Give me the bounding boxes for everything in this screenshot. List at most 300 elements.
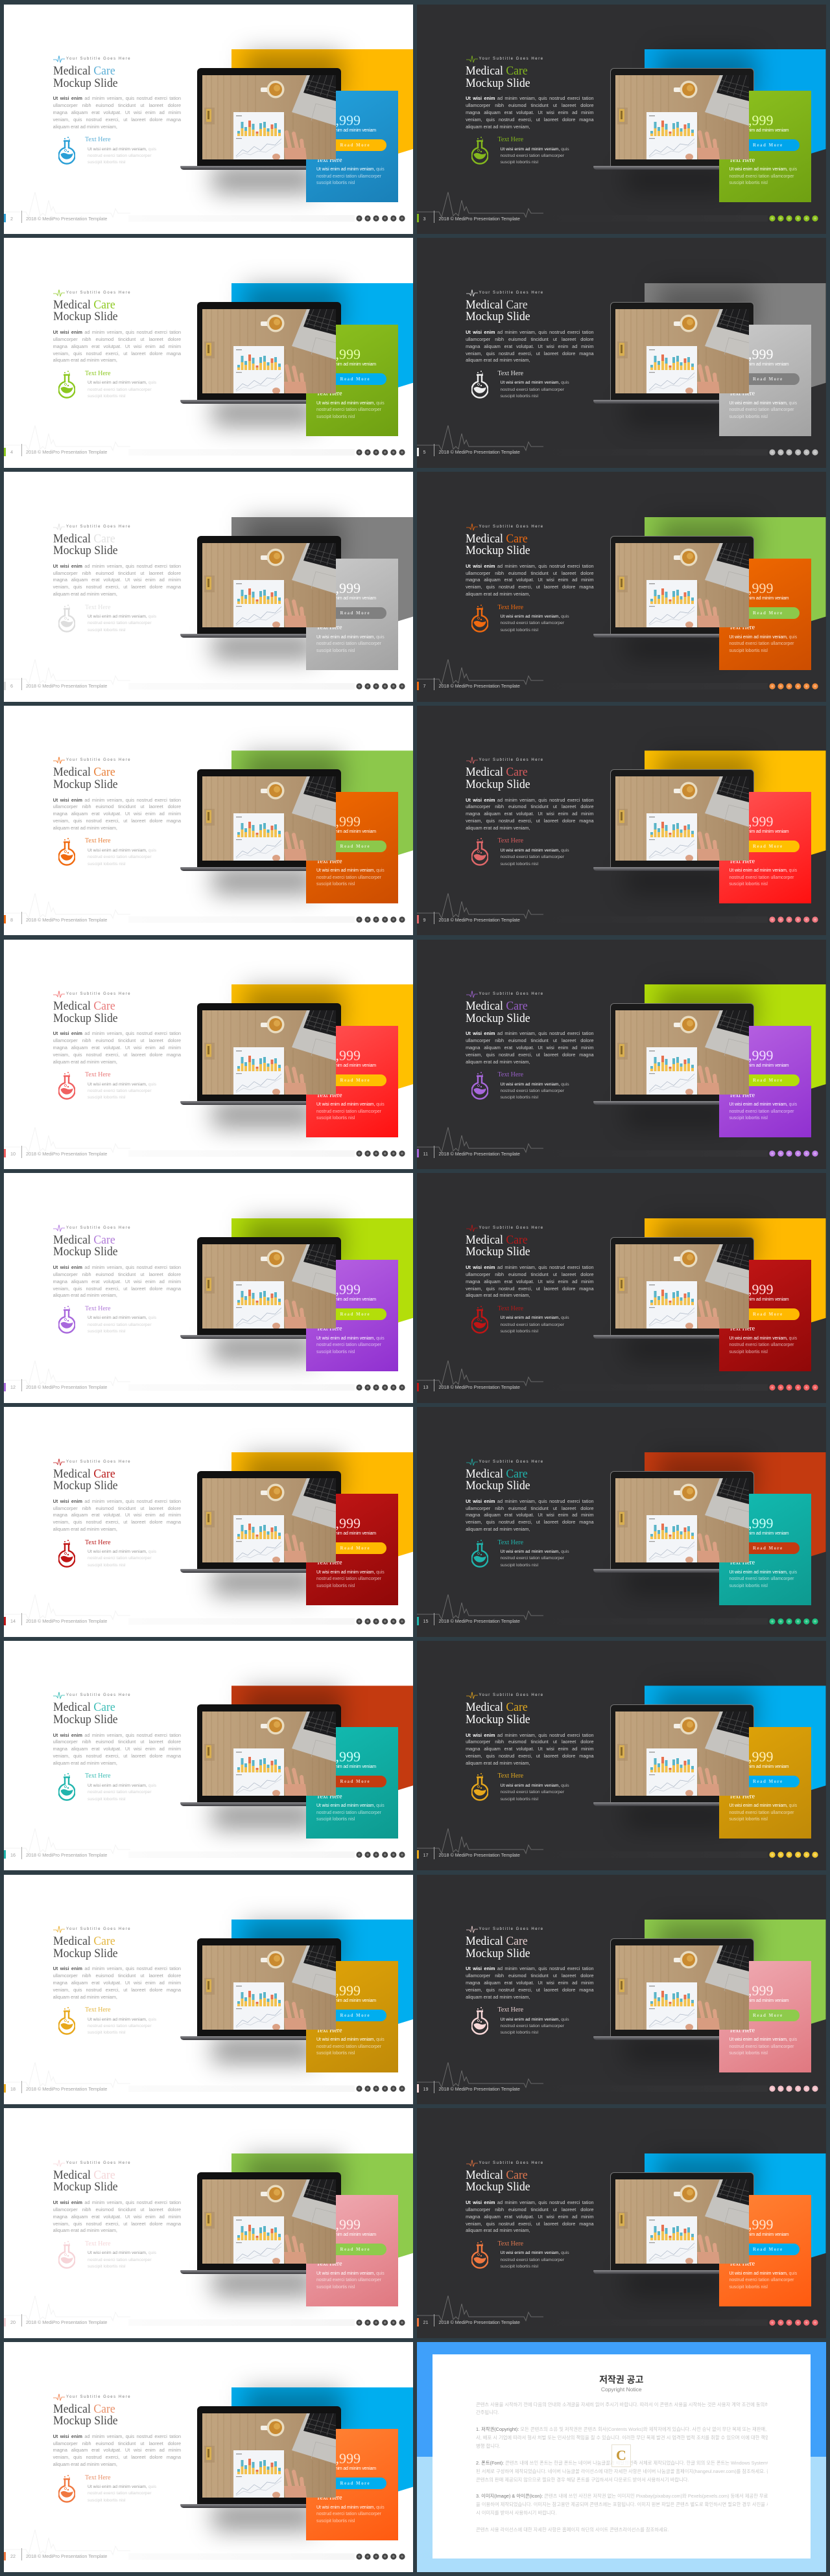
title: Mockup Slide (53, 1479, 117, 1492)
price card: nostrud exerci tation ullamcorper (729, 876, 794, 880)
body text: veniam, quis nostrud exerci, ut laoreet dolore magna (466, 818, 594, 824)
price card (718, 1493, 811, 1605)
subtitle: Your Subtitle Goes Here (66, 1226, 131, 1230)
footer: 2018 © MediPro Presentation Template (26, 1618, 107, 1624)
footer: 2018 © MediPro Presentation Template (438, 683, 520, 689)
feature text: Text Here (85, 2474, 111, 2481)
title: Medical Care (53, 999, 115, 1013)
icon: flask (471, 1538, 488, 1567)
feature text (498, 370, 576, 401)
body text: Ut wisi enim ad minim veniam, quis nostrud exerci tation (53, 95, 181, 101)
icon: flask (58, 1071, 75, 1100)
feature text: Ut wisi enim ad minim veniam, quis (88, 2251, 156, 2255)
price card: Ut wisi enim ad minim veniam, quis (316, 167, 385, 172)
laptop (197, 1704, 341, 1802)
feature text (85, 1772, 163, 1804)
panel: slide 13 (416, 1173, 826, 1403)
price card (306, 1727, 398, 1839)
feature text: Ut wisi enim ad minim veniam, quis (501, 146, 569, 152)
body text: aliquam erat ad minim veniam, (53, 2461, 117, 2467)
laptop (197, 2172, 341, 2270)
feature text: suscipit lobortis nisl (501, 2030, 538, 2035)
heartbeat line (4, 653, 130, 686)
price card: nostrud exerci tation ullamcorper (729, 642, 794, 646)
price card: Ut wisi enim ad minim veniam (319, 128, 376, 133)
title (466, 299, 574, 323)
price card: $9,999 (322, 813, 361, 830)
heartbeat line (4, 2056, 130, 2088)
feature text: suscipit lobortis nisl (501, 862, 538, 866)
feature text: Ut wisi enim ad minim veniam, quis (501, 2017, 569, 2022)
price card: Text Here (316, 1559, 342, 1566)
body text: Ut wisi enim ad minim veniam, quis nostrud exerci tation (53, 1030, 181, 1036)
subtitle: Your Subtitle Goes Here (479, 291, 544, 295)
price card: $9,999 (734, 1982, 773, 1999)
footer: 2018 © MediPro Presentation Template (26, 1384, 107, 1390)
body text: aliquam erat ad minim veniam, (466, 1059, 530, 1065)
price card: suscipit lobortis nisl (316, 882, 355, 887)
price card: suscipit lobortis nisl (316, 648, 355, 653)
price card: Ut wisi enim ad minim veniam, quis (729, 635, 797, 639)
feature text: nostrud exerci tation ullamcorper (501, 1089, 564, 1093)
laptop (610, 535, 753, 634)
laptop (610, 302, 753, 400)
feature text: suscipit lobortis nisl (88, 1329, 126, 1334)
feature text: suscipit lobortis nisl (88, 1095, 126, 1100)
footer (4, 1612, 413, 1627)
footer: 18 (10, 2085, 16, 2092)
feature text: nostrud exerci tation ullamcorper (88, 621, 152, 625)
feature text: Text Here (498, 2240, 523, 2247)
body text: veniam, quis nostrud exerci, ut laoreet dolore magna (53, 1987, 181, 1993)
price card: Ut wisi enim ad minim veniam, quis (729, 1102, 797, 1107)
price card (306, 91, 398, 202)
body text (53, 563, 181, 598)
body text: veniam, quis nostrud exerci, ut laoreet dolore magna (53, 584, 181, 590)
laptop screen photo (615, 1945, 748, 2030)
laptop screen photo (615, 543, 748, 627)
body text: Ut wisi enim ad minim veniam, quis nostrud exerci tation (466, 95, 594, 101)
laptop (610, 1704, 753, 1802)
body text: ullamcorper nibh euismod tincidunt ut laoreet dolore (466, 336, 594, 342)
feature text: Text Here (85, 2006, 111, 2013)
price card: Ut wisi enim ad minim veniam (731, 830, 788, 834)
price card: nostrud exerci tation ullamcorper (316, 1577, 381, 1581)
body text: ullamcorper nibh euismod tincidunt ut laoreet dolore (466, 102, 594, 108)
feature text (85, 2006, 163, 2037)
price card: Ut wisi enim ad minim veniam, quis (316, 2505, 385, 2509)
price card: Read More (340, 1312, 370, 1317)
price card: Text Here (316, 1091, 342, 1099)
body text: magna aliquam erat volutpat. Ut wisi enim ad minim (466, 343, 594, 349)
price card: Ut wisi enim ad minim veniam (731, 1531, 788, 1536)
price card (718, 91, 811, 202)
laptop base (180, 867, 342, 871)
body text: magna aliquam erat volutpat. Ut wisi enim ad minim (53, 1746, 181, 1752)
footer: 2018 © MediPro Presentation Template (26, 1852, 107, 1858)
body text: magna aliquam erat volutpat. Ut wisi enim ad minim (53, 577, 181, 583)
panel: slide 8 (4, 706, 413, 935)
price card: Ut wisi enim ad minim veniam, quis (729, 1570, 797, 1575)
body text: veniam, quis nostrud exerci, ut laoreet dolore magna (53, 1519, 181, 1525)
feature text: Ut wisi enim ad minim veniam, quis (501, 2251, 569, 2255)
footer (416, 1144, 826, 1160)
body text: magna aliquam erat volutpat. Ut wisi enim ad minim (466, 577, 594, 583)
body text: aliquam erat ad minim veniam, (53, 124, 117, 130)
body text: veniam, quis nostrud exerci, ut laoreet dolore magna (466, 1052, 594, 1058)
body text: Ut wisi enim ad minim veniam, quis nostrud exerci tation (466, 2199, 594, 2205)
price card: Ut wisi enim ad minim veniam, quis (729, 1336, 797, 1341)
subtitle: Your Subtitle Goes Here (479, 1927, 544, 1931)
icon: flask (471, 1071, 488, 1100)
feature text: nostrud exerci tation ullamcorper (88, 2258, 152, 2262)
footer: 2018 © MediPro Presentation Template (26, 683, 107, 689)
body text: aliquam erat ad minim veniam, (53, 1059, 117, 1065)
icon: flask (58, 1538, 75, 1567)
price card: Text Here (729, 858, 755, 865)
footer: 2018 © MediPro Presentation Template (438, 1618, 520, 1624)
price card: Ut wisi enim ad minim veniam (319, 2466, 376, 2470)
price card: $9,999 (734, 346, 773, 362)
price card (718, 1961, 811, 2072)
price card: Read More (753, 844, 783, 849)
body text (53, 1030, 181, 1066)
title: Medical Care (466, 2168, 528, 2182)
title: Medical Care (466, 1467, 528, 1480)
laptop base (593, 1568, 755, 1572)
icon: flask (58, 604, 75, 632)
footer: 2018 © MediPro Presentation Template (26, 2085, 107, 2092)
laptop (610, 1938, 753, 2036)
body text: Ut wisi enim ad minim veniam, quis nostrud exerci tation (53, 1732, 181, 1738)
subtitle: Your Subtitle Goes Here (66, 1459, 131, 1463)
price card: Read More (753, 2247, 783, 2252)
feature text (498, 604, 576, 635)
price card: Read More (753, 2013, 783, 2018)
price card: $9,999 (322, 1281, 361, 1297)
subtitle: Your Subtitle Goes Here (479, 758, 544, 762)
heartbeat line (416, 653, 543, 686)
feature text (498, 1071, 576, 1102)
body text: Ut wisi enim ad minim veniam, quis nostrud exerci tation (466, 329, 594, 335)
price card: $9,999 (322, 1515, 361, 1531)
laptop base (593, 1101, 755, 1105)
body text: veniam, quis nostrud exerci, ut laoreet dolore magna (466, 1753, 594, 1759)
footer (4, 1144, 413, 1160)
price card: nostrud exerci tation ullamcorper (729, 1811, 794, 1815)
body text: ullamcorper nibh euismod tincidunt ut laoreet dolore (466, 570, 594, 576)
subtitle: Your Subtitle Goes Here (479, 1226, 544, 1230)
feature text: Ut wisi enim ad minim veniam, quis (501, 380, 569, 385)
body text: veniam, quis nostrud exerci, ut laoreet dolore magna (466, 2221, 594, 2227)
price card: $9,999 (734, 813, 773, 830)
price card: Text Here (316, 1793, 342, 1800)
heartbeat line (4, 1121, 130, 1154)
body text: veniam, quis nostrud exerci, ut laoreet dolore magna (53, 1052, 181, 1058)
price card: Text Here (729, 1091, 755, 1099)
footer: 2018 © MediPro Presentation Template (26, 917, 107, 923)
icon: flask (58, 1772, 75, 1801)
footer: 3 (423, 215, 425, 222)
footer (417, 211, 818, 223)
icon: flask (58, 2474, 75, 2503)
feature text: suscipit lobortis nisl (88, 1797, 126, 1802)
footer (416, 1846, 826, 1861)
price card: Ut wisi enim ad minim veniam (731, 596, 788, 600)
laptop (197, 1003, 341, 1101)
feature text (85, 2240, 163, 2271)
price card: Ut wisi enim ad minim veniam, quis (316, 1804, 385, 1808)
body text: aliquam erat ad minim veniam, (53, 1292, 117, 1298)
footer: 2018 © MediPro Presentation Template (438, 1151, 520, 1156)
heartbeat line (4, 2524, 130, 2556)
body text: ullamcorper nibh euismod tincidunt ut laoreet dolore (53, 2441, 181, 2446)
laptop base (593, 1802, 755, 1806)
laptop screen photo (615, 1010, 748, 1095)
laptop base (593, 2036, 755, 2040)
subtitle (466, 56, 544, 63)
price card: nostrud exerci tation ullamcorper (729, 1577, 794, 1581)
footer: 10 (10, 1151, 16, 1156)
body text: ullamcorper nibh euismod tincidunt ut laoreet dolore (466, 1271, 594, 1277)
feature text: Ut wisi enim ad minim veniam, quis (88, 1316, 156, 1320)
price card: Read More (340, 143, 370, 148)
title: Mockup Slide (466, 2180, 530, 2194)
feature text: nostrud exerci tation ullamcorper (88, 1323, 152, 1327)
icon: flask (58, 2240, 75, 2269)
feature text: nostrud exerci tation ullamcorper (501, 1323, 564, 1327)
feature text (498, 1772, 576, 1804)
title: Mockup Slide (466, 544, 530, 557)
feature text (85, 1538, 163, 1570)
feature text: Text Here (85, 1772, 111, 1780)
footer: 2018 © MediPro Presentation Template (26, 2319, 107, 2325)
body text (466, 563, 594, 598)
body text: veniam, quis nostrud exerci, ut laoreet dolore magna (53, 2454, 181, 2460)
title (466, 1235, 574, 1259)
body text (466, 797, 594, 832)
feature text: nostrud exerci tation ullamcorper (88, 388, 152, 392)
subtitle (53, 2393, 141, 2400)
feature text: suscipit lobortis nisl (501, 1095, 538, 1100)
price card: Ut wisi enim ad minim veniam (319, 1297, 376, 1302)
feature text: suscipit lobortis nisl (88, 2498, 126, 2503)
price card: Ut wisi enim ad minim veniam (319, 830, 376, 834)
price card: Text Here (729, 1325, 755, 1332)
price card: Read More (340, 2013, 370, 2018)
laptop screen photo (202, 1712, 336, 1796)
laptop (610, 2172, 753, 2270)
body text: ullamcorper nibh euismod tincidunt ut laoreet dolore (53, 1739, 181, 1745)
laptop (197, 2406, 341, 2504)
body text (53, 95, 182, 130)
body text: Ut wisi enim ad minim veniam, quis nostrud exerci tation (466, 1264, 594, 1270)
body text: ullamcorper nibh euismod tincidunt ut laoreet dolore (53, 1038, 181, 1043)
icon: flask (58, 837, 75, 866)
laptop screen photo (202, 1244, 336, 1329)
footer: 2018 © MediPro Presentation Template (438, 2085, 520, 2092)
price card: suscipit lobortis nisl (729, 1817, 768, 1822)
price card (306, 1260, 398, 1371)
price card: nostrud exerci tation ullamcorper (316, 1811, 381, 1815)
panel: slide 10 (4, 940, 413, 1169)
title (466, 767, 574, 791)
heartbeat line (416, 1121, 543, 1154)
feature text: suscipit lobortis nisl (501, 1797, 538, 1802)
price card: Text Here (729, 2260, 755, 2268)
feature text: Ut wisi enim ad minim veniam, quis (501, 1082, 569, 1086)
body text (466, 329, 594, 364)
title: Medical Care (53, 298, 115, 312)
price card (306, 559, 398, 670)
laptop (197, 1237, 341, 1335)
panel: slide 5 (416, 238, 826, 468)
feature text: nostrud exerci tation ullamcorper (501, 855, 564, 859)
title: Medical Care (466, 1233, 528, 1247)
price card: nostrud exerci tation ullamcorper (316, 642, 381, 646)
price card: suscipit lobortis nisl (316, 1817, 355, 1822)
feature text: nostrud exerci tation ullamcorper (501, 2258, 564, 2262)
price card: $9,999 (322, 1047, 361, 1063)
logo stamp: C (616, 2447, 626, 2463)
laptop base (593, 166, 755, 170)
laptop base (180, 2504, 342, 2508)
feature text: nostrud exerci tation ullamcorper (88, 1556, 152, 1561)
subtitle: Your Subtitle Goes Here (479, 525, 544, 529)
title: Medical Care (53, 1233, 115, 1247)
feature text (85, 370, 156, 399)
title: Mockup Slide (53, 1245, 117, 1259)
body text: veniam, quis nostrud exerci, ut laoreet dolore magna (53, 351, 181, 356)
price card: $9,999 (734, 1281, 773, 1297)
heartbeat line (416, 1354, 543, 1387)
subtitle (466, 522, 554, 530)
body text: ullamcorper nibh euismod tincidunt ut laoreet dolore (466, 1038, 594, 1043)
body text: magna aliquam erat volutpat. Ut wisi enim ad minim (466, 2214, 594, 2220)
feature text (498, 837, 576, 868)
body text: ullamcorper nibh euismod tincidunt ut laoreet dolore (466, 1505, 594, 1511)
laptop (610, 68, 753, 166)
icon: flask (58, 1305, 75, 1334)
body text: veniam, quis nostrud exerci, ut laoreet dolore magna (53, 1753, 181, 1759)
title: Medical Care (466, 999, 528, 1013)
body text: magna aliquam erat volutpat. Ut wisi enim ad minim (53, 2447, 181, 2453)
feature text: Ut wisi enim ad minim veniam, quis (88, 1082, 156, 1086)
subtitle: Your Subtitle Goes Here (66, 1693, 131, 1697)
panel: slide 12 (4, 1173, 413, 1403)
title: Medical Care (53, 1467, 115, 1480)
subtitle: Your Subtitle Goes Here (479, 57, 544, 61)
feature text (85, 2474, 163, 2505)
feature text (85, 837, 163, 868)
body text: magna aliquam erat volutpat. Ut wisi enim ad minim (466, 1746, 594, 1752)
body text: Ut wisi enim ad minim veniam, quis nostrud exerci tation (466, 1498, 594, 1504)
footer: 17 (423, 1852, 428, 1858)
subtitle: Your Subtitle Goes Here (479, 2161, 544, 2165)
footer: 2018 © MediPro Presentation Template (26, 215, 107, 222)
footer: 2018 © MediPro Presentation Template (438, 917, 520, 923)
price card: Ut wisi enim ad minim veniam, quis (729, 868, 797, 873)
price card: Ut wisi enim ad minim veniam (731, 128, 788, 133)
body text: Ut wisi enim ad minim veniam, quis nostrud exerci tation (466, 797, 594, 803)
footer: 7 (423, 683, 425, 689)
body text: ullamcorper nibh euismod tincidunt ut laoreet dolore (53, 1271, 181, 1277)
subtitle (53, 56, 131, 63)
body text: veniam, quis nostrud exerci, ut laoreet dolore magna (466, 117, 594, 122)
price card (306, 1961, 398, 2072)
heartbeat line (4, 1354, 130, 1387)
price card: nostrud exerci tation ullamcorper (729, 1343, 794, 1347)
feature text (85, 136, 156, 165)
feature text: nostrud exerci tation ullamcorper (501, 388, 564, 392)
feature text: suscipit lobortis nisl (501, 394, 538, 399)
body text: aliquam erat ad minim veniam, (466, 124, 530, 130)
subtitle (466, 1458, 554, 1466)
laptop (197, 302, 341, 400)
price card: $9,999 (322, 2216, 361, 2233)
feature text: Text Here (85, 1071, 111, 1078)
heartbeat line (416, 1588, 543, 1621)
price card: suscipit lobortis nisl (729, 1116, 768, 1120)
body text: magna aliquam erat volutpat. Ut wisi enim ad minim (466, 1980, 594, 1986)
title (466, 2170, 574, 2194)
price card: suscipit lobortis nisl (729, 181, 768, 185)
footer (416, 1378, 826, 1393)
footer: 9 (423, 917, 425, 923)
body text: magna aliquam erat volutpat. Ut wisi enim ad minim (53, 1045, 181, 1050)
title: Mockup Slide (466, 310, 530, 323)
laptop base (180, 2036, 342, 2040)
title: Mockup Slide (466, 778, 530, 791)
laptop base (593, 1335, 755, 1339)
body text (466, 1732, 594, 1767)
body text: ullamcorper nibh euismod tincidunt ut laoreet dolore (53, 1505, 181, 1511)
price card: Ut wisi enim ad minim veniam, quis (729, 2037, 797, 2042)
feature text: suscipit lobortis nisl (88, 2030, 126, 2035)
subtitle: Your Subtitle Goes Here (66, 1927, 131, 1931)
feature text: suscipit lobortis nisl (501, 1329, 538, 1334)
footer: 14 (10, 1618, 16, 1624)
body text (53, 797, 181, 832)
title (53, 2170, 161, 2194)
feature text: Text Here (85, 2240, 111, 2247)
price card (718, 1260, 811, 1371)
title (53, 64, 117, 90)
feature text: suscipit lobortis nisl (88, 394, 126, 399)
footer (4, 2313, 413, 2328)
title: Mockup Slide (466, 1012, 530, 1025)
title (53, 1001, 161, 1025)
body text: Ut wisi enim ad minim veniam, quis nostrud exerci tation (53, 2433, 181, 2439)
price card: $9,999 (734, 1515, 773, 1531)
title: Mockup Slide (53, 1012, 117, 1025)
body text: ullamcorper nibh euismod tincidunt ut laoreet dolore (53, 2207, 181, 2212)
title: Medical Care (466, 765, 528, 779)
footer: 11 (423, 1151, 428, 1156)
body text: Ut wisi enim ad minim veniam, quis nostrud exerci tation (53, 797, 181, 803)
footer (4, 2547, 413, 2562)
price card: $9,999 (734, 112, 773, 128)
footer: 2018 © MediPro Presentation Template (438, 2319, 520, 2325)
footer (4, 677, 413, 692)
panel: slide 20 (4, 2108, 413, 2338)
title (466, 1468, 574, 1492)
body text: Ut wisi enim ad minim veniam, quis nostrud exerci tation (466, 1732, 594, 1738)
price card (718, 1026, 811, 1137)
feature text: suscipit lobortis nisl (501, 2264, 538, 2269)
body text: magna aliquam erat volutpat. Ut wisi enim ad minim (466, 1279, 594, 1284)
body text: Ut wisi enim ad minim veniam, quis nostrud exerci tation (466, 1966, 594, 1971)
